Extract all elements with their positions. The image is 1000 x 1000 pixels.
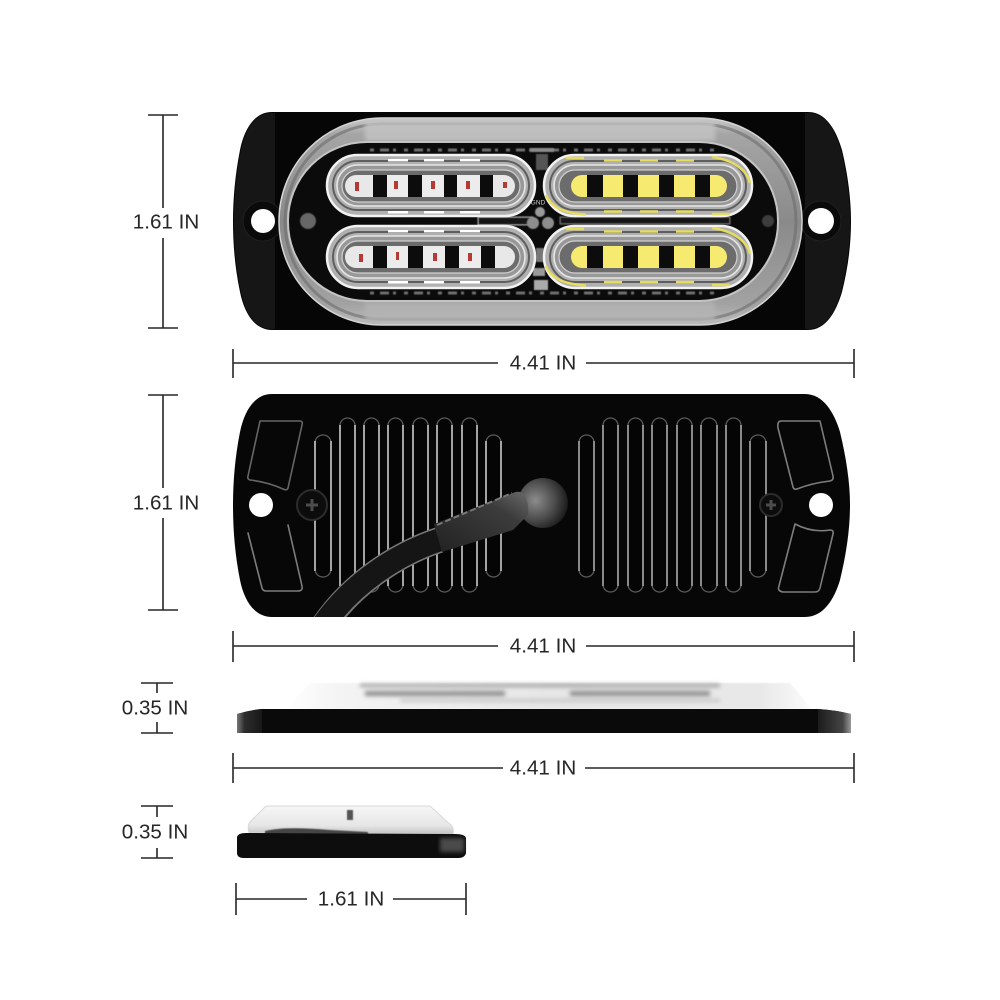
dimension: side thickness 0.35 IN xyxy=(122,683,188,733)
red LED module bottom xyxy=(327,226,535,288)
dimension: side width 4.41 IN: 4.41 IN xyxy=(510,756,576,780)
red LED module top xyxy=(327,155,535,216)
right cooling fins xyxy=(579,418,766,592)
dimension: side width 4.41 IN xyxy=(233,753,854,783)
mounting holes xyxy=(249,493,833,517)
right screw xyxy=(760,494,782,516)
end lens xyxy=(248,806,453,834)
side view: long edge xyxy=(237,683,851,733)
red LEDs xyxy=(345,246,515,268)
right mounting flap xyxy=(805,113,850,329)
white LED module bottom xyxy=(544,226,752,288)
corner pads xyxy=(248,421,833,592)
lens reflections xyxy=(360,684,720,702)
dimension: back width 4.41 IN xyxy=(233,631,854,662)
right mounting hole xyxy=(801,201,841,241)
back view of light xyxy=(233,394,850,628)
end housing xyxy=(237,833,466,858)
left cooling fins xyxy=(315,418,501,592)
light housing xyxy=(233,112,851,330)
dimension: back height 1.61 IN: 1.61 IN xyxy=(133,492,199,514)
cable with heat shrink and grommet xyxy=(321,478,568,628)
dimension: back width 4.41 IN: 4.41 IN xyxy=(510,634,576,658)
dimension: end thickness 0.35 IN xyxy=(122,806,188,858)
top view: front of light xyxy=(233,112,851,330)
yellow-white LEDs xyxy=(571,175,727,197)
left mounting flap xyxy=(234,113,275,329)
end view: short edge xyxy=(237,806,466,858)
dimension: end thickness 0.35 IN: 0.35 IN xyxy=(122,820,188,844)
side housing xyxy=(237,709,851,733)
dimension: front height 1.61 IN xyxy=(133,115,199,328)
left end highlight xyxy=(237,709,262,733)
dimension: end width 1.61 IN xyxy=(236,883,466,915)
dimension: side thickness 0.35 IN: 0.35 IN xyxy=(122,696,188,720)
end lens screw detail xyxy=(347,810,353,820)
yellow-white LEDs xyxy=(571,246,727,268)
circuit board details xyxy=(300,148,774,293)
back plate xyxy=(233,394,850,617)
left mounting hole xyxy=(243,201,283,241)
end lens reflection xyxy=(265,828,368,834)
left screw xyxy=(297,490,327,520)
yellow reflections xyxy=(546,228,750,286)
dimension: front height 1.61 IN: 1.61 IN xyxy=(133,210,199,234)
side lens xyxy=(285,683,812,709)
dimension: front width 4.41 IN: 4.41 IN xyxy=(510,352,576,374)
dimension: front width 4.41 IN xyxy=(233,349,854,378)
dimension: back height 1.61 IN xyxy=(133,395,199,610)
end housing highlight xyxy=(440,838,464,852)
clear lens xyxy=(279,118,802,325)
red LEDs xyxy=(345,175,515,197)
dimension: end width 1.61 IN: 1.61 IN xyxy=(318,888,384,910)
yellow reflections xyxy=(546,157,750,214)
white LED module top xyxy=(544,155,752,216)
right end highlight xyxy=(818,709,851,733)
GND board label: GND xyxy=(531,200,546,206)
